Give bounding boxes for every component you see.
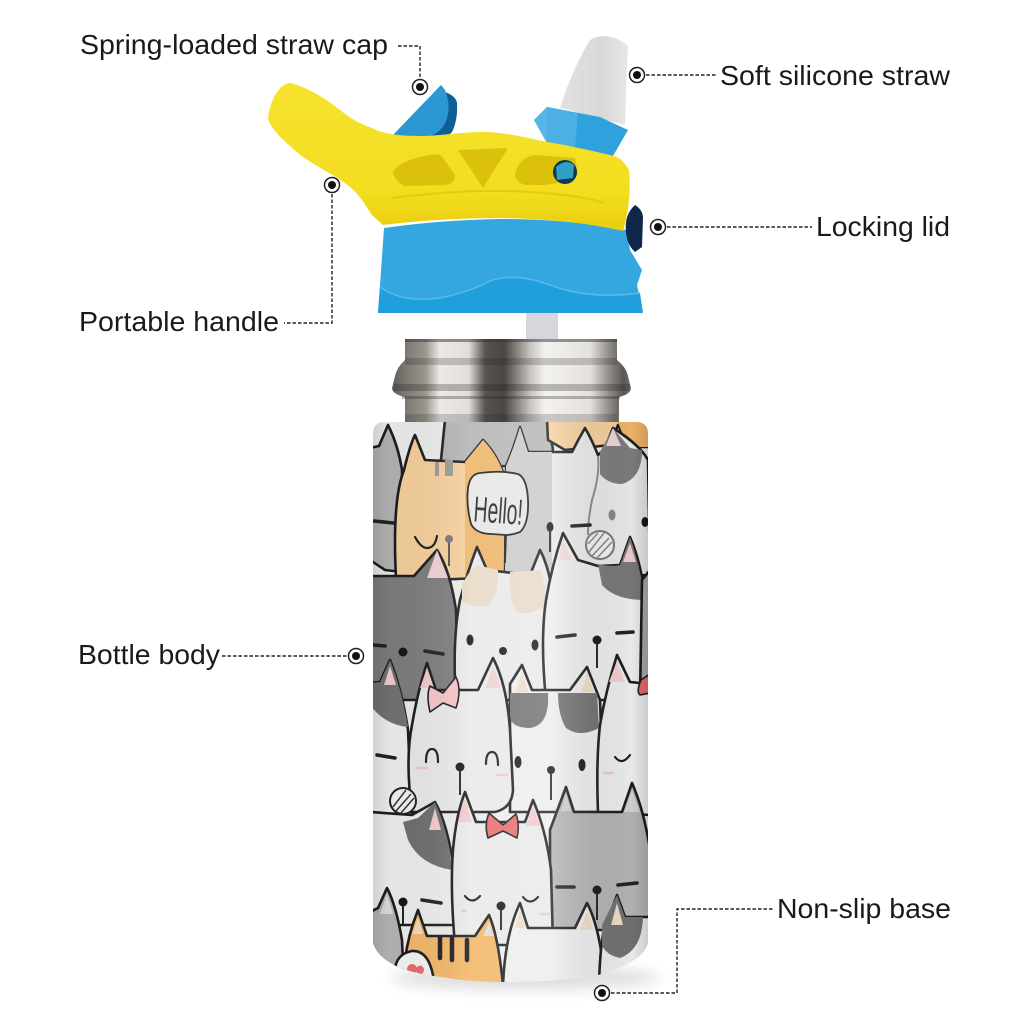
label: bottle body: Bottle body [78,639,220,670]
bows [428,674,650,712]
label: locking lid: Locking lid [816,211,950,242]
yarn ball: grey [586,531,614,559]
label: spring-loaded straw cap [80,29,428,94]
bottom row cats [370,888,650,990]
bottle body with cat pattern [370,420,650,990]
ground shadow [390,966,660,990]
top row cats [370,420,650,580]
label: soft silicone straw: Soft silicone straw [720,60,950,91]
label: non-slip base [594,893,951,1000]
label: bottle body [78,639,364,670]
second row cats [370,533,650,700]
third row cats [370,655,650,820]
body lighting [373,422,648,982]
lid [268,36,643,313]
red bow tie [486,813,518,838]
handle windows [393,148,578,188]
locking button [626,205,643,252]
blue straw base [534,107,628,156]
bubble text: Hello! [472,488,524,533]
straw tube [526,312,558,346]
steel neck [392,339,631,424]
bottle assembly [268,36,660,990]
speech bubble [467,472,528,563]
straw lever [553,160,577,184]
label: spring-loaded straw cap: Spring-loaded straw cap [80,29,388,60]
label: locking lid [650,211,950,242]
yarn ball: left [390,788,416,814]
label: portable handle: Portable handle [79,306,279,337]
label: portable handle [79,178,340,337]
label: non-slip base: Non-slip base [777,893,951,924]
spring-loaded straw cap [392,85,457,138]
fourth row cats [370,783,650,945]
blue base [378,219,643,313]
soft silicone straw [560,36,628,125]
collar ridge [392,191,604,203]
yellow handle and collar [268,83,630,231]
label: soft silicone straw [630,60,950,91]
